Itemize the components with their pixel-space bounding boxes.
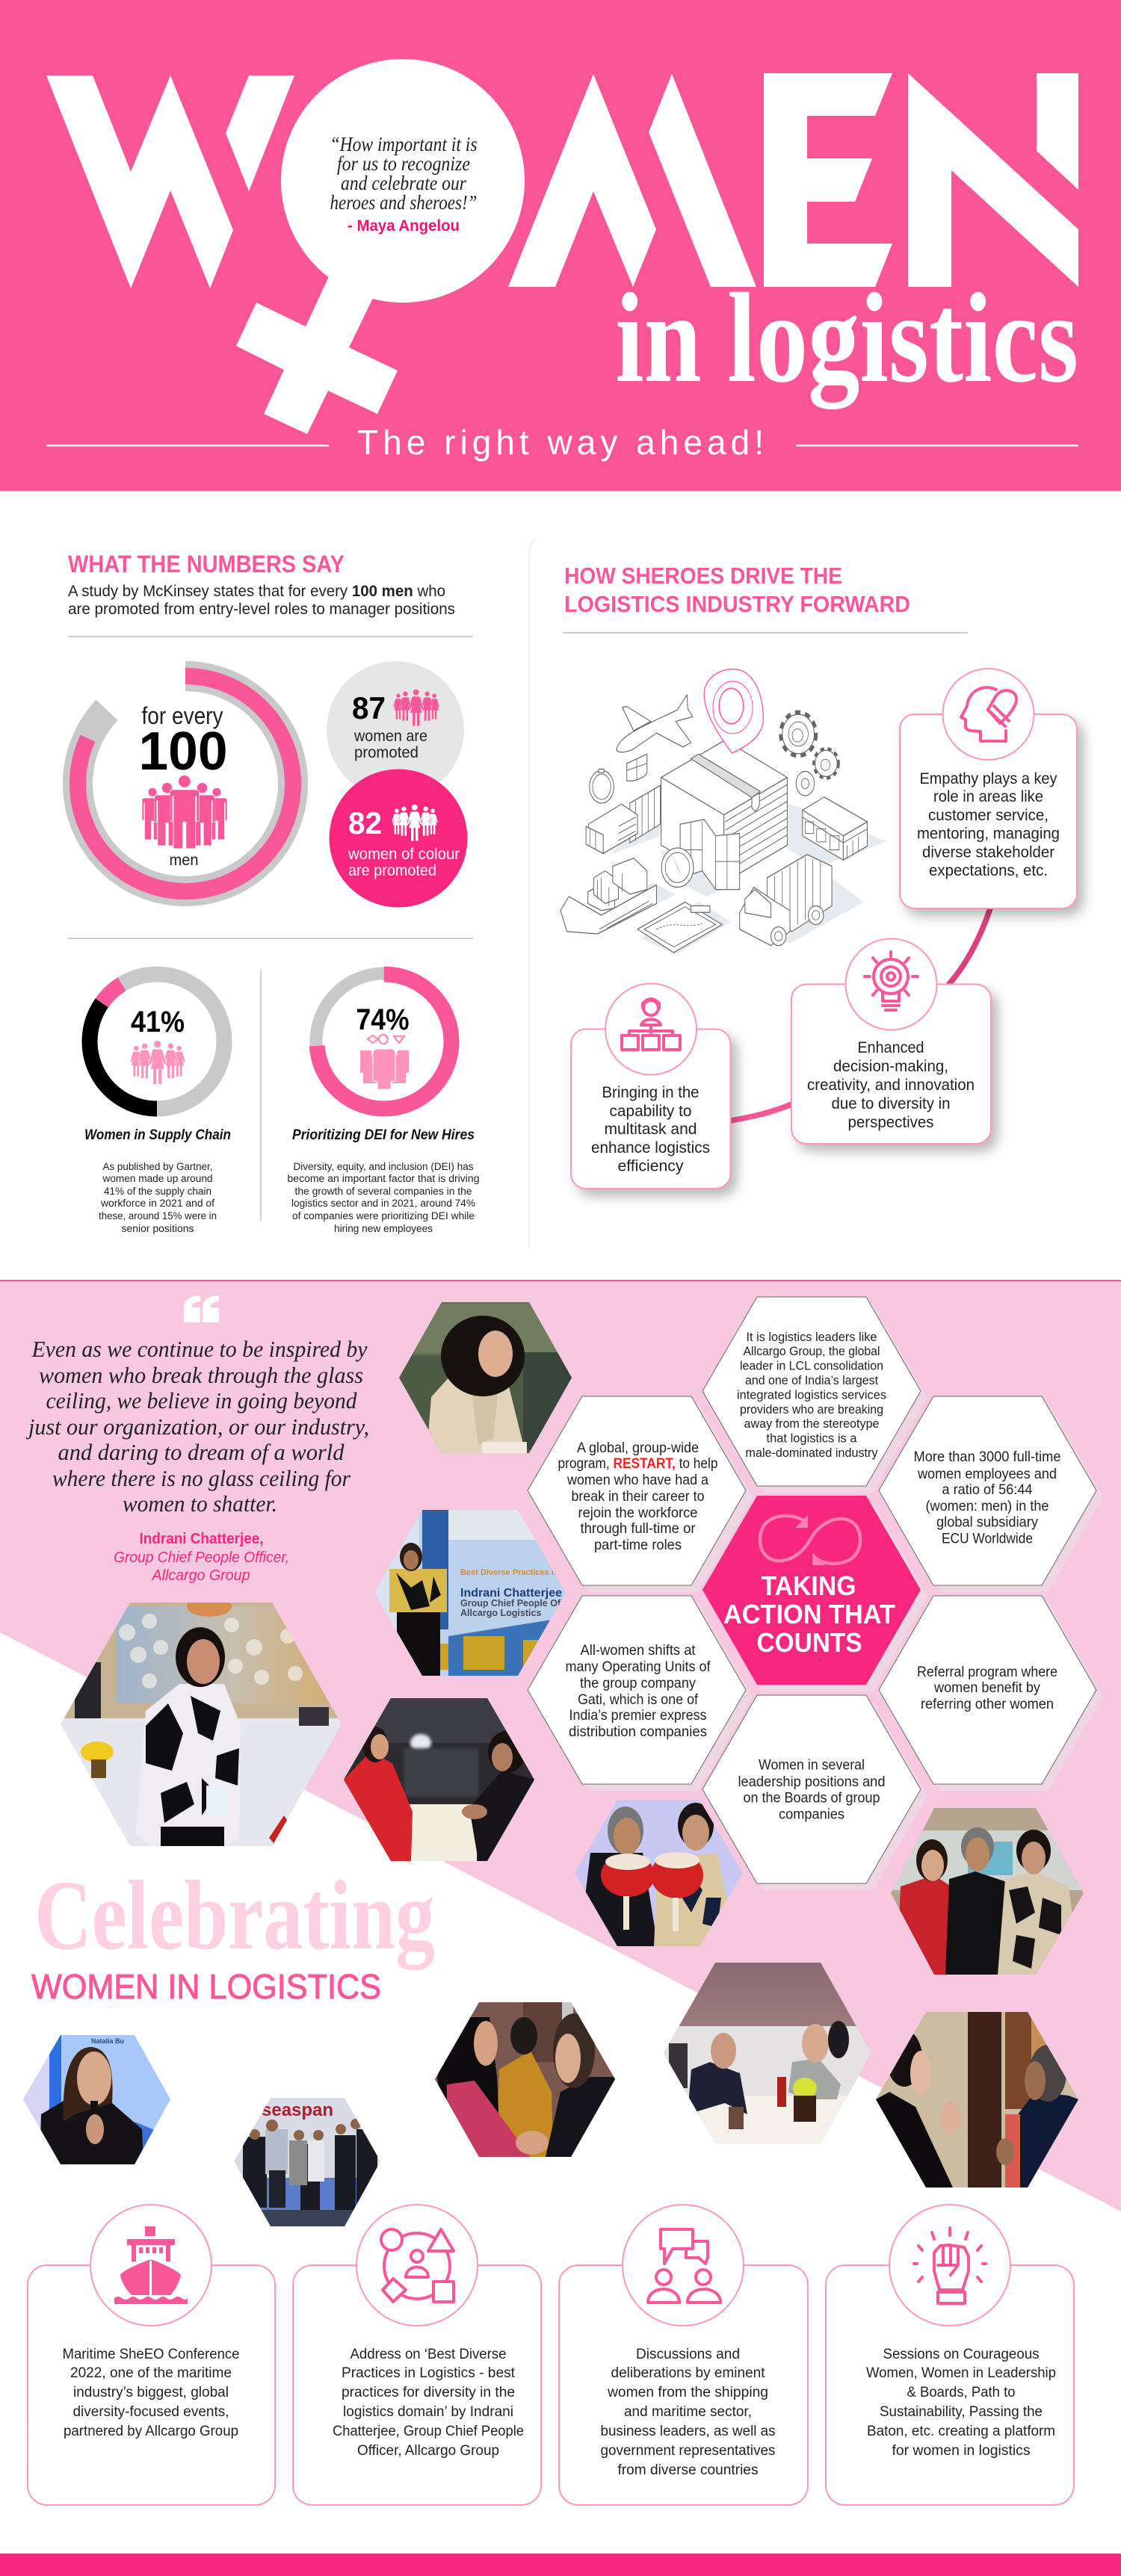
card: address on best diverse practices: Chatterjee, Group Chief People (333, 2424, 524, 2439)
hexagon: leadership positions: on the Boards of group (743, 1790, 880, 1806)
icon: diverse hires (360, 1035, 409, 1089)
card: sessions on courageous women: Sessions on Courageous (883, 2347, 1039, 2362)
hexagon: all-women shifts: the group company (580, 1675, 696, 1691)
hexagon: all-women shifts: All-women shifts at (580, 1642, 696, 1659)
gears (781, 713, 816, 755)
box (661, 740, 787, 815)
hexagon: referral program (879, 1596, 1096, 1784)
card: maritime SheEO conference (28, 2205, 275, 2505)
icon: group of men (142, 775, 227, 849)
hexagon: logistics leaders (702, 1297, 921, 1486)
intro text: A study by McKinsey states that for every 100 men who (68, 582, 445, 600)
stat: 82 women of colour promoted: 82 (348, 805, 382, 840)
chart: 41% donut (90, 974, 224, 1109)
hexagon: 3000 employees: (women: men) in the (925, 1498, 1049, 1514)
photo: two women with signs (575, 1800, 743, 1946)
heading (564, 563, 910, 617)
card: enhanced decision-making: decision-making, (833, 1058, 948, 1075)
card: enhanced decision-making: due to diversity in (831, 1095, 951, 1112)
card: empathy: customer service, (928, 807, 1049, 824)
illustration: logistics isometric (560, 669, 887, 955)
text: women in supply chain: As published by Gartner, (103, 1161, 212, 1172)
photo: award group seaspan (234, 2098, 380, 2226)
quote by Maya Angelou: - Maya Angelou (348, 217, 460, 235)
hexagon: 3000 employees: global subsidiary (936, 1514, 1038, 1530)
card: maritime SheEO conference: industry’s biggest, global (73, 2385, 229, 2400)
photo: speaker with microphone: Natalia Bu (91, 2037, 124, 2045)
card: address on best diverse practices: Practices in Logistics - best (342, 2365, 516, 2381)
quote text: just our organization, or our industry, (25, 1414, 369, 1440)
quote text: where there is no glass ceiling for (52, 1465, 351, 1491)
hexagon group: taking action that counts (528, 1297, 1103, 1890)
hexagon: RESTART program (528, 1396, 746, 1585)
text: prioritizing DEI (287, 1127, 480, 1234)
heading: LOGISTICS INDUSTRY FORWARD (564, 591, 910, 617)
heading: WHAT THE NUMBERS SAY (68, 551, 345, 578)
clipboard (637, 902, 722, 953)
card: address on best diverse practices (293, 2205, 541, 2505)
hexagon: RESTART program: through full-time or (580, 1520, 696, 1537)
card: enhanced decision-making: Enhanced (858, 1039, 924, 1056)
footer bar (0, 2554, 1121, 2576)
quote text (25, 1336, 369, 1517)
hexagon: 3000 employees: ECU Worldwide (942, 1530, 1033, 1546)
text: prioritizing DEI: become an important factor that is driving (287, 1173, 480, 1184)
quote by Maya Angelou: for us to recognize (337, 152, 470, 175)
photo: two women greeting (435, 2002, 615, 2157)
card: discussions and deliberations: and maritime sector, (624, 2404, 752, 2420)
card: maritime SheEO conference: 2022, one of the maritime (70, 2365, 232, 2381)
icon: speech bubbles and people (648, 2229, 720, 2303)
hexagon: RESTART program: part-time roles (594, 1537, 682, 1553)
heading: celebrating women in logistics (31, 1860, 435, 2006)
hexagon: leadership positions: Women in several (759, 1757, 865, 1774)
truck right (767, 855, 832, 932)
text: women in supply chain: senior positions (121, 1223, 194, 1234)
warehouse (803, 797, 868, 836)
icon: quotation mark (184, 1295, 219, 1322)
hexagon: 3000 employees: women employees and (917, 1466, 1057, 1482)
hexagon: RESTART program: A global, group-wide (577, 1440, 699, 1456)
photo: Indrani Chatterjee at event (61, 1596, 342, 1846)
hexagon: all-women shifts: India’s premier express (569, 1707, 707, 1724)
hexagon: logistics leaders: providers who are breaking (740, 1402, 883, 1417)
card: empathy (900, 669, 1077, 908)
hexagon: referral program: women benefit by (933, 1679, 1040, 1696)
photo: delegates at table (664, 1963, 871, 2143)
attribution: Allcargo Group (152, 1567, 250, 1584)
card: address on best diverse practices: practices for diversity in the (342, 2385, 515, 2400)
card: capability to multitask: capability to (610, 1103, 692, 1120)
icon: raised fist (914, 2228, 986, 2303)
hexagon: logistics leaders: away from the stereotype (744, 1417, 879, 1431)
card: sessions on courageous women: Baton, etc. creating a platform (867, 2424, 1055, 2439)
heading: celebrating women in logistics: Celebrating (34, 1860, 435, 1970)
card: capability to multitask (571, 983, 731, 1189)
train/truck left (630, 785, 661, 843)
hexagon: centre title: TAKING (761, 1570, 856, 1601)
card: sessions on courageous women (826, 2205, 1074, 2505)
icon: head with heart (961, 687, 1016, 741)
card: capability to multitask: enhance logistics (591, 1139, 710, 1157)
card: capability to multitask: multitask and (604, 1121, 697, 1138)
hexagon: leadership positions: leadership positions and (738, 1774, 885, 1790)
card: address on best diverse practices: logistics domain’ by Indrani (343, 2404, 513, 2420)
card: empathy: mentoring, managing (917, 825, 1060, 843)
attribution: Indrani Chatterjee, (139, 1531, 263, 1547)
card: enhanced decision-making: creativity, and innovation (807, 1077, 975, 1094)
icon: manager and org boxes (622, 999, 680, 1050)
card: capability to multitask: efficiency (617, 1158, 684, 1174)
icon: diversity shapes (381, 2229, 454, 2302)
heading: celebrating women in logistics: WOMEN IN LOGISTICS (31, 1967, 381, 2006)
card: empathy: role in areas like (933, 788, 1043, 805)
photo: speaker on stage: Allcargo Logistics (460, 1608, 541, 1618)
card: sessions on courageous women: Women, Women in Leadership (866, 2365, 1056, 2381)
shield + stopwatch (627, 754, 647, 781)
text: women in supply chain: workforce in 2021 and of (100, 1198, 214, 1209)
photo: award group seaspan: seaspan (262, 2100, 333, 2120)
photo: speaker on stage: Best Diverse Practices in Logistics (460, 1568, 597, 1577)
card: sessions on courageous women: for women in logistics (892, 2443, 1030, 2459)
stat: 82 women of colour promoted: are promoted (348, 862, 436, 879)
hexagon: all-women shifts: Gati, which is one of (578, 1691, 699, 1708)
photo: speaker on stage (374, 1510, 566, 1676)
hexagon: referral program: referring other women (921, 1696, 1054, 1712)
card: discussions and deliberations: deliberations by eminent (611, 2365, 765, 2381)
heading: HOW SHEROES DRIVE THE (564, 563, 842, 589)
hexagon: RESTART program: program, RESTART, to help (558, 1455, 718, 1472)
quote by Maya Angelou: “How important it is (330, 133, 477, 155)
hexagon: RESTART program: break in their career to (571, 1488, 705, 1505)
panel: quote and action background (0, 1280, 1121, 2211)
hexagon: leadership positions: companies (779, 1806, 844, 1823)
hexagon: logistics leaders: leader in LCL consolidation (740, 1358, 883, 1373)
quote text: women to shatter. (123, 1490, 277, 1517)
chart: 100 men donut: for every (142, 702, 223, 729)
hexagon shadows (534, 1304, 1103, 1890)
card: maritime SheEO conference: Maritime SheEO Conference (63, 2347, 239, 2362)
attribution (114, 1531, 289, 1584)
hexagon: all-women shifts: distribution companies (569, 1724, 707, 1740)
chart: 100 men donut: 100 (139, 722, 227, 781)
hexagon: RESTART program: women who have had a (566, 1472, 708, 1488)
quote text: women who break through the glass (39, 1362, 363, 1388)
stat: 82 women of colour promoted: women of colour (348, 846, 460, 863)
hexagon: centre title (702, 1496, 921, 1685)
text: women in supply chain: these, around 15% were in (99, 1210, 217, 1222)
text: women in supply chain: 41% of the supply chain (104, 1186, 211, 1197)
pin (704, 669, 763, 753)
photo: speaker on stage: Indrani Chatterjee (460, 1587, 562, 1600)
hexagon: 3000 employees: a ratio of 56:44 (942, 1481, 1033, 1498)
hexagon: logistics leaders: Allcargo Group, the global (743, 1344, 880, 1358)
card: empathy: diverse stakeholder (922, 844, 1054, 861)
panel: how sheroes drive the industry (529, 540, 1077, 1249)
card: discussions and deliberations: from diverse countries (617, 2462, 758, 2478)
quote text: ceiling, we believe in going beyond (46, 1387, 357, 1414)
ship (560, 885, 656, 934)
quote text: Even as we continue to be inspired by (31, 1336, 368, 1362)
panel: what the numbers say (68, 551, 480, 1234)
quote text: and daring to dream of a world (58, 1439, 345, 1465)
text: prioritizing DEI: the growth of several companies in the (294, 1186, 472, 1197)
photo: two women at cocktail table (344, 1698, 534, 1861)
intro text (68, 582, 455, 618)
chart: 41% donut: 41% (131, 1006, 185, 1038)
photo: speaker with microphone (23, 2035, 170, 2164)
text: prioritizing DEI: logistics sector and in 2021, around 74% (291, 1198, 475, 1209)
text: women in supply chain (84, 1127, 231, 1234)
photo: portrait in beige coat (399, 1302, 572, 1453)
quote by Maya Angelou (330, 133, 477, 235)
hexagon: all-women shifts: many Operating Units of (565, 1659, 711, 1675)
text: prioritizing DEI: Diversity, equity, and inclusion (DEI) has (293, 1161, 474, 1172)
stat: 87 women promoted: 87 (352, 690, 386, 725)
card: address on best diverse practices: Address on ‘Best Diverse (350, 2347, 507, 2362)
hexagon: RESTART program: rejoin the workforce (578, 1505, 698, 1521)
icon: group of women white (392, 804, 438, 841)
plane (617, 695, 693, 752)
text: women in supply chain: women made up around (102, 1173, 212, 1184)
card: address on best diverse practices: Officer, Allcargo Group (357, 2443, 499, 2459)
card: discussions and deliberations: government representatives (601, 2443, 776, 2459)
hexagon: centre title: COUNTS (756, 1627, 862, 1658)
hexagon: all-women shifts (528, 1596, 746, 1784)
quote by Maya Angelou: heroes and sheroes!” (330, 191, 477, 214)
card: discussions and deliberations: women from the shipping (607, 2385, 768, 2400)
hexagon: logistics leaders: and one of India’s largest (745, 1373, 878, 1387)
tagline: The right way ahead! (357, 423, 764, 462)
card: discussions and deliberations: Discussions and (636, 2347, 740, 2362)
intro text: are promoted from entry-level roles to manager positions (68, 600, 455, 618)
icon: women group light (130, 1041, 185, 1085)
card: enhanced decision-making (791, 938, 991, 1144)
photo: conversation (876, 2012, 1078, 2188)
hexagon: logistics leaders: that logistics is a (767, 1431, 857, 1445)
connector curves (731, 908, 990, 1121)
icon: infinity arrows (760, 1515, 860, 1565)
hexagon: logistics leaders: It is logistics leaders like (746, 1330, 877, 1344)
text: women in supply chain: Women in Supply Chain (84, 1127, 231, 1143)
stat: 87 women promoted (327, 661, 464, 799)
chart: 100 men donut: men (169, 852, 199, 869)
stat: 82 women of colour promoted (329, 770, 468, 907)
headline word WOMEN (46, 59, 1078, 434)
hexagon: logistics leaders: male-dominated industry (746, 1446, 878, 1460)
header banner (0, 0, 1121, 491)
card: discussions and deliberations (559, 2205, 808, 2505)
icon: lightbulb gear (865, 952, 918, 1010)
hexagon: referral program: Referral program where (917, 1664, 1057, 1680)
hexagon: 3000 employees (879, 1396, 1096, 1585)
stat: 87 women promoted: promoted (354, 744, 419, 761)
compass (661, 848, 694, 888)
attribution: Group Chief People Officer, (114, 1549, 289, 1566)
hexagon: leadership positions (702, 1695, 921, 1883)
card: sessions on courageous women: Sustainability, Passing the (880, 2404, 1043, 2420)
photo: three women (891, 1808, 1084, 1975)
card: discussions and deliberations: business leaders, as well as (601, 2424, 776, 2439)
card: sessions on courageous women: & Boards, Path to (907, 2385, 1015, 2400)
text: prioritizing DEI: Prioritizing DEI for New Hires (292, 1127, 475, 1143)
hexagon: logistics leaders: integrated logistics services (737, 1388, 886, 1402)
photo: speaker on stage: Group Chief People Officer (460, 1598, 581, 1609)
card: maritime SheEO conference: partnered by Allcargo Group (64, 2424, 238, 2439)
card: empathy: expectations, etc. (929, 862, 1048, 879)
stat: 87 women promoted: women are (353, 728, 427, 745)
hexagon: centre title: ACTION THAT (723, 1599, 895, 1629)
icon: group of women (393, 689, 439, 726)
icon: ship (114, 2226, 188, 2304)
card: enhanced decision-making: perspectives (847, 1114, 934, 1131)
text: prioritizing DEI: hiring new employees (334, 1223, 433, 1234)
chart: 74% donut (316, 973, 452, 1109)
chart: 100 men donut (78, 676, 293, 891)
map (680, 820, 740, 890)
card: empathy: Empathy plays a key (919, 770, 1057, 787)
hexagon: 3000 employees: More than 3000 full-time (913, 1449, 1061, 1465)
text: prioritizing DEI: of companies were prioritizing DEI while (292, 1210, 475, 1222)
card: maritime SheEO conference: diversity-focused events, (73, 2404, 229, 2420)
card: capability to multitask: Bringing in the (602, 1084, 700, 1101)
quote by Maya Angelou: and celebrate our (341, 172, 466, 194)
chart: 74% donut: 74% (356, 1003, 410, 1036)
